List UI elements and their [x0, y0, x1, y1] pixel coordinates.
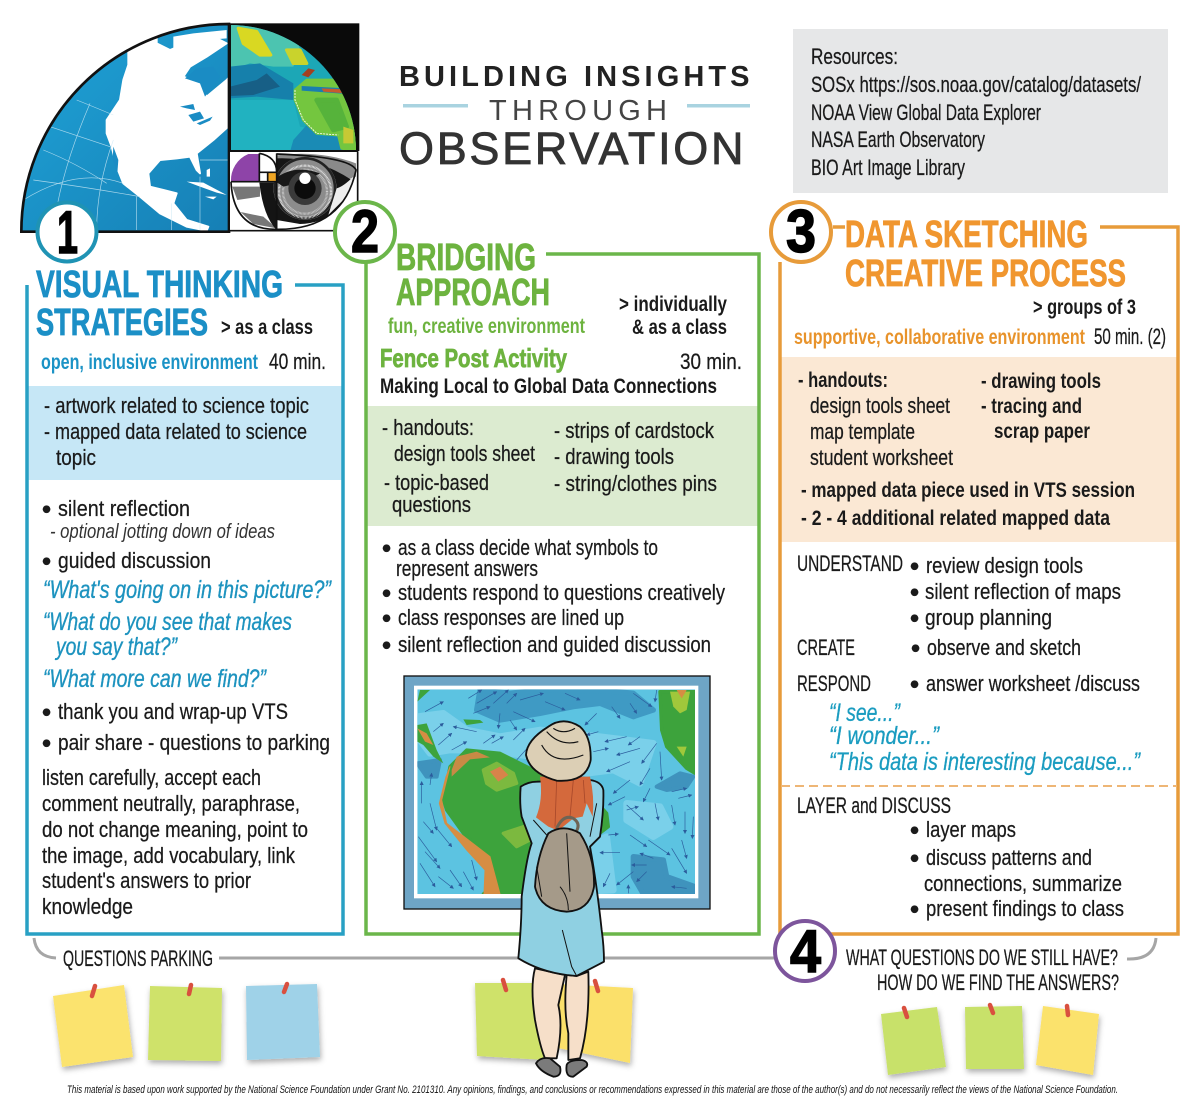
resources box: Resources: [811, 44, 898, 69]
title: BUILDING INSIGHTS [399, 61, 754, 93]
sentence starters: “I see...” [829, 699, 901, 727]
activity steps: • [382, 630, 391, 660]
understand create respond steps: CREATE [797, 635, 855, 660]
steps and prompts: you say that?” [54, 633, 178, 661]
steps and prompts: guided discussion [58, 548, 211, 573]
materials band text 2: - strips of cardstock [554, 418, 715, 443]
environment and time 3: supportive, collaborative environment [794, 325, 1085, 349]
materials band text: - mapped data related to science [44, 419, 307, 444]
facilitation guidance: comment neutrally, paraphrase, [42, 791, 300, 816]
connector: questions parking line [34, 938, 1156, 959]
eye with golden ratio spiral [230, 152, 358, 231]
title: THROUGH [489, 95, 671, 127]
resources box: NOAA View Global Data Explorer [811, 100, 1041, 125]
environment 2: fun, creative environment [388, 314, 585, 338]
heading 2 [396, 237, 550, 314]
steps and prompts: - optional jotting down of ideas [50, 521, 275, 543]
resources box: NASA Earth Observatory [811, 127, 986, 152]
number badge 3 [771, 198, 831, 265]
environment and time: open, inclusive environment [41, 350, 258, 374]
grouping note: > as a class [221, 315, 313, 339]
materials band text 3: - drawing tools [981, 369, 1101, 393]
materials band text 3: map template [810, 419, 915, 444]
layer and discuss steps: • [910, 843, 919, 873]
understand create respond steps: observe and sketch [927, 635, 1081, 660]
understand create respond steps: silent reflection of maps [925, 579, 1121, 604]
layer and discuss steps: discuss patterns and [926, 845, 1092, 870]
sentence starters: “I wonder...” [829, 722, 940, 750]
grouping note 3: > groups of 3 [1033, 295, 1136, 319]
layer and discuss steps: LAYER and DISCUSS [797, 793, 951, 818]
globe quarter [21, 24, 230, 232]
understand create respond steps: answer worksheet /discuss [926, 671, 1140, 696]
facilitation guidance: do not change meaning, point to [42, 817, 308, 842]
understand create respond steps: • [911, 633, 920, 663]
materials band text 2 [382, 415, 717, 517]
layer and discuss steps [797, 793, 1124, 924]
steps and prompts: • [42, 494, 51, 524]
understand create respond steps: • [910, 669, 919, 699]
steps and prompts: • [42, 546, 51, 576]
number badge 4 [775, 918, 835, 985]
layer and discuss steps: • [910, 815, 919, 845]
activity steps: class responses are lined up [398, 605, 624, 630]
facilitation guidance: listen carefully, accept each [42, 765, 261, 790]
layer and discuss steps: layer maps [926, 817, 1016, 842]
resources box: BIO Art Image Library [811, 155, 966, 180]
data map quarter [229, 23, 359, 152]
steps and prompts: “What more can we find?” [43, 665, 267, 693]
number badge 1: 1 [57, 199, 78, 266]
parking label: QUESTIONS PARKING [63, 946, 213, 971]
understand create respond steps: • [910, 577, 919, 607]
activity steps: as a class decide what symbols to [398, 535, 658, 560]
materials band text [44, 393, 309, 470]
understand create respond steps: RESPOND [797, 671, 871, 696]
materials band text 3: - handouts: [798, 368, 888, 392]
grouping note 2: > individually [619, 292, 727, 316]
activity title: 30 min. [680, 349, 742, 374]
facilitation guidance: the image, add vocabulary, link [42, 843, 296, 868]
materials band text 2: design tools sheet [394, 441, 536, 466]
materials band text 3: student worksheet [810, 445, 954, 470]
heading 1: VISUAL THINKING [36, 264, 283, 306]
activity title: Making Local to Global Data Connections [380, 374, 717, 398]
number badge 2 [335, 198, 395, 265]
materials band text 3: scrap paper [994, 419, 1090, 443]
understand create respond steps: UNDERSTAND [797, 551, 903, 576]
number badge 2: 2 [351, 198, 379, 265]
materials band text: - artwork related to science topic [44, 393, 309, 418]
materials band text 3: design tools sheet [810, 393, 951, 418]
panel 2: bridging approach [335, 198, 759, 934]
activity steps: • [382, 533, 391, 563]
steps and prompts [42, 494, 332, 758]
materials band text 2: - topic-based [384, 470, 489, 495]
materials band text 2: - string/clothes pins [554, 471, 717, 496]
environment and time: 40 min. [269, 349, 326, 374]
steps and prompts: pair share - questions to parking [58, 730, 330, 755]
understand create respond steps: • [910, 551, 919, 581]
materials band text 2: - drawing tools [554, 444, 674, 469]
panel 3: data sketching creative process [771, 198, 1178, 934]
activity title: Fence Post Activity [380, 343, 567, 373]
panel 1: visual thinking strategies [27, 199, 343, 934]
sticky notes: right group [881, 1005, 1099, 1075]
steps and prompts: • [42, 728, 51, 758]
steps and prompts: thank you and wrap-up VTS [58, 699, 288, 724]
activity steps: • [382, 603, 391, 633]
layer and discuss steps: connections, summarize [924, 871, 1122, 896]
activity steps: • [382, 578, 391, 608]
materials band text 3: - tracing and [981, 394, 1082, 418]
closing questions [846, 945, 1119, 995]
understand create respond steps [797, 551, 1140, 699]
heading 2: APPROACH [396, 272, 550, 314]
number badge 4: 4 [790, 918, 822, 985]
resources box [793, 29, 1168, 193]
heading 3: DATA SKETCHING [845, 214, 1088, 256]
grouping note 2 [619, 292, 727, 339]
layer and discuss steps: • [910, 894, 919, 924]
materials band text 2: questions [392, 492, 471, 517]
title [399, 61, 754, 174]
heading 3 [845, 214, 1126, 295]
activity title [380, 343, 742, 398]
understand create respond steps: • [910, 603, 919, 633]
activity steps: silent reflection and guided discussion [398, 632, 711, 657]
facilitation guidance: student's answers to prior [42, 868, 251, 893]
heading 2: BRIDGING [396, 237, 536, 279]
layer and discuss steps: present findings to class [926, 896, 1124, 921]
sticky notes: left group [53, 984, 320, 1067]
heading 1 [36, 264, 283, 344]
illustration: globe, data map and eye in golden spiral [21, 23, 359, 232]
wall map [404, 676, 710, 909]
facilitation guidance: knowledge [42, 894, 133, 919]
viewer figure [518, 721, 604, 1077]
environment and time 3: 50 min. (2) [1094, 324, 1166, 349]
materials band text 2: - handouts: [382, 415, 474, 440]
number badge 3: 3 [786, 198, 816, 265]
materials band text 3: - 2 - 4 additional related mapped data [801, 506, 1111, 530]
materials band text: topic [56, 445, 96, 470]
understand create respond steps: review design tools [926, 553, 1083, 578]
facilitation guidance [42, 765, 308, 919]
sentence starters [829, 699, 1141, 776]
activity steps [382, 533, 726, 660]
title: OBSERVATION [399, 123, 749, 174]
steps and prompts: “What do you see that makes [43, 608, 292, 636]
steps and prompts: “What's going on in this picture?” [43, 576, 332, 604]
understand create respond steps: group planning [925, 605, 1052, 630]
materials band text 3 [798, 368, 1135, 530]
activity steps: students respond to questions creatively [398, 580, 726, 605]
heading 1: STRATEGIES [36, 302, 208, 344]
grouping note 2: & as a class [632, 315, 727, 339]
activity steps: represent answers [396, 556, 538, 581]
number badge 1 [38, 199, 96, 266]
steps and prompts: silent reflection [58, 496, 190, 521]
steps and prompts: • [42, 697, 51, 727]
wall map with arrows and viewer illustration [404, 676, 710, 1077]
sticky notes: middle group [475, 980, 633, 1063]
